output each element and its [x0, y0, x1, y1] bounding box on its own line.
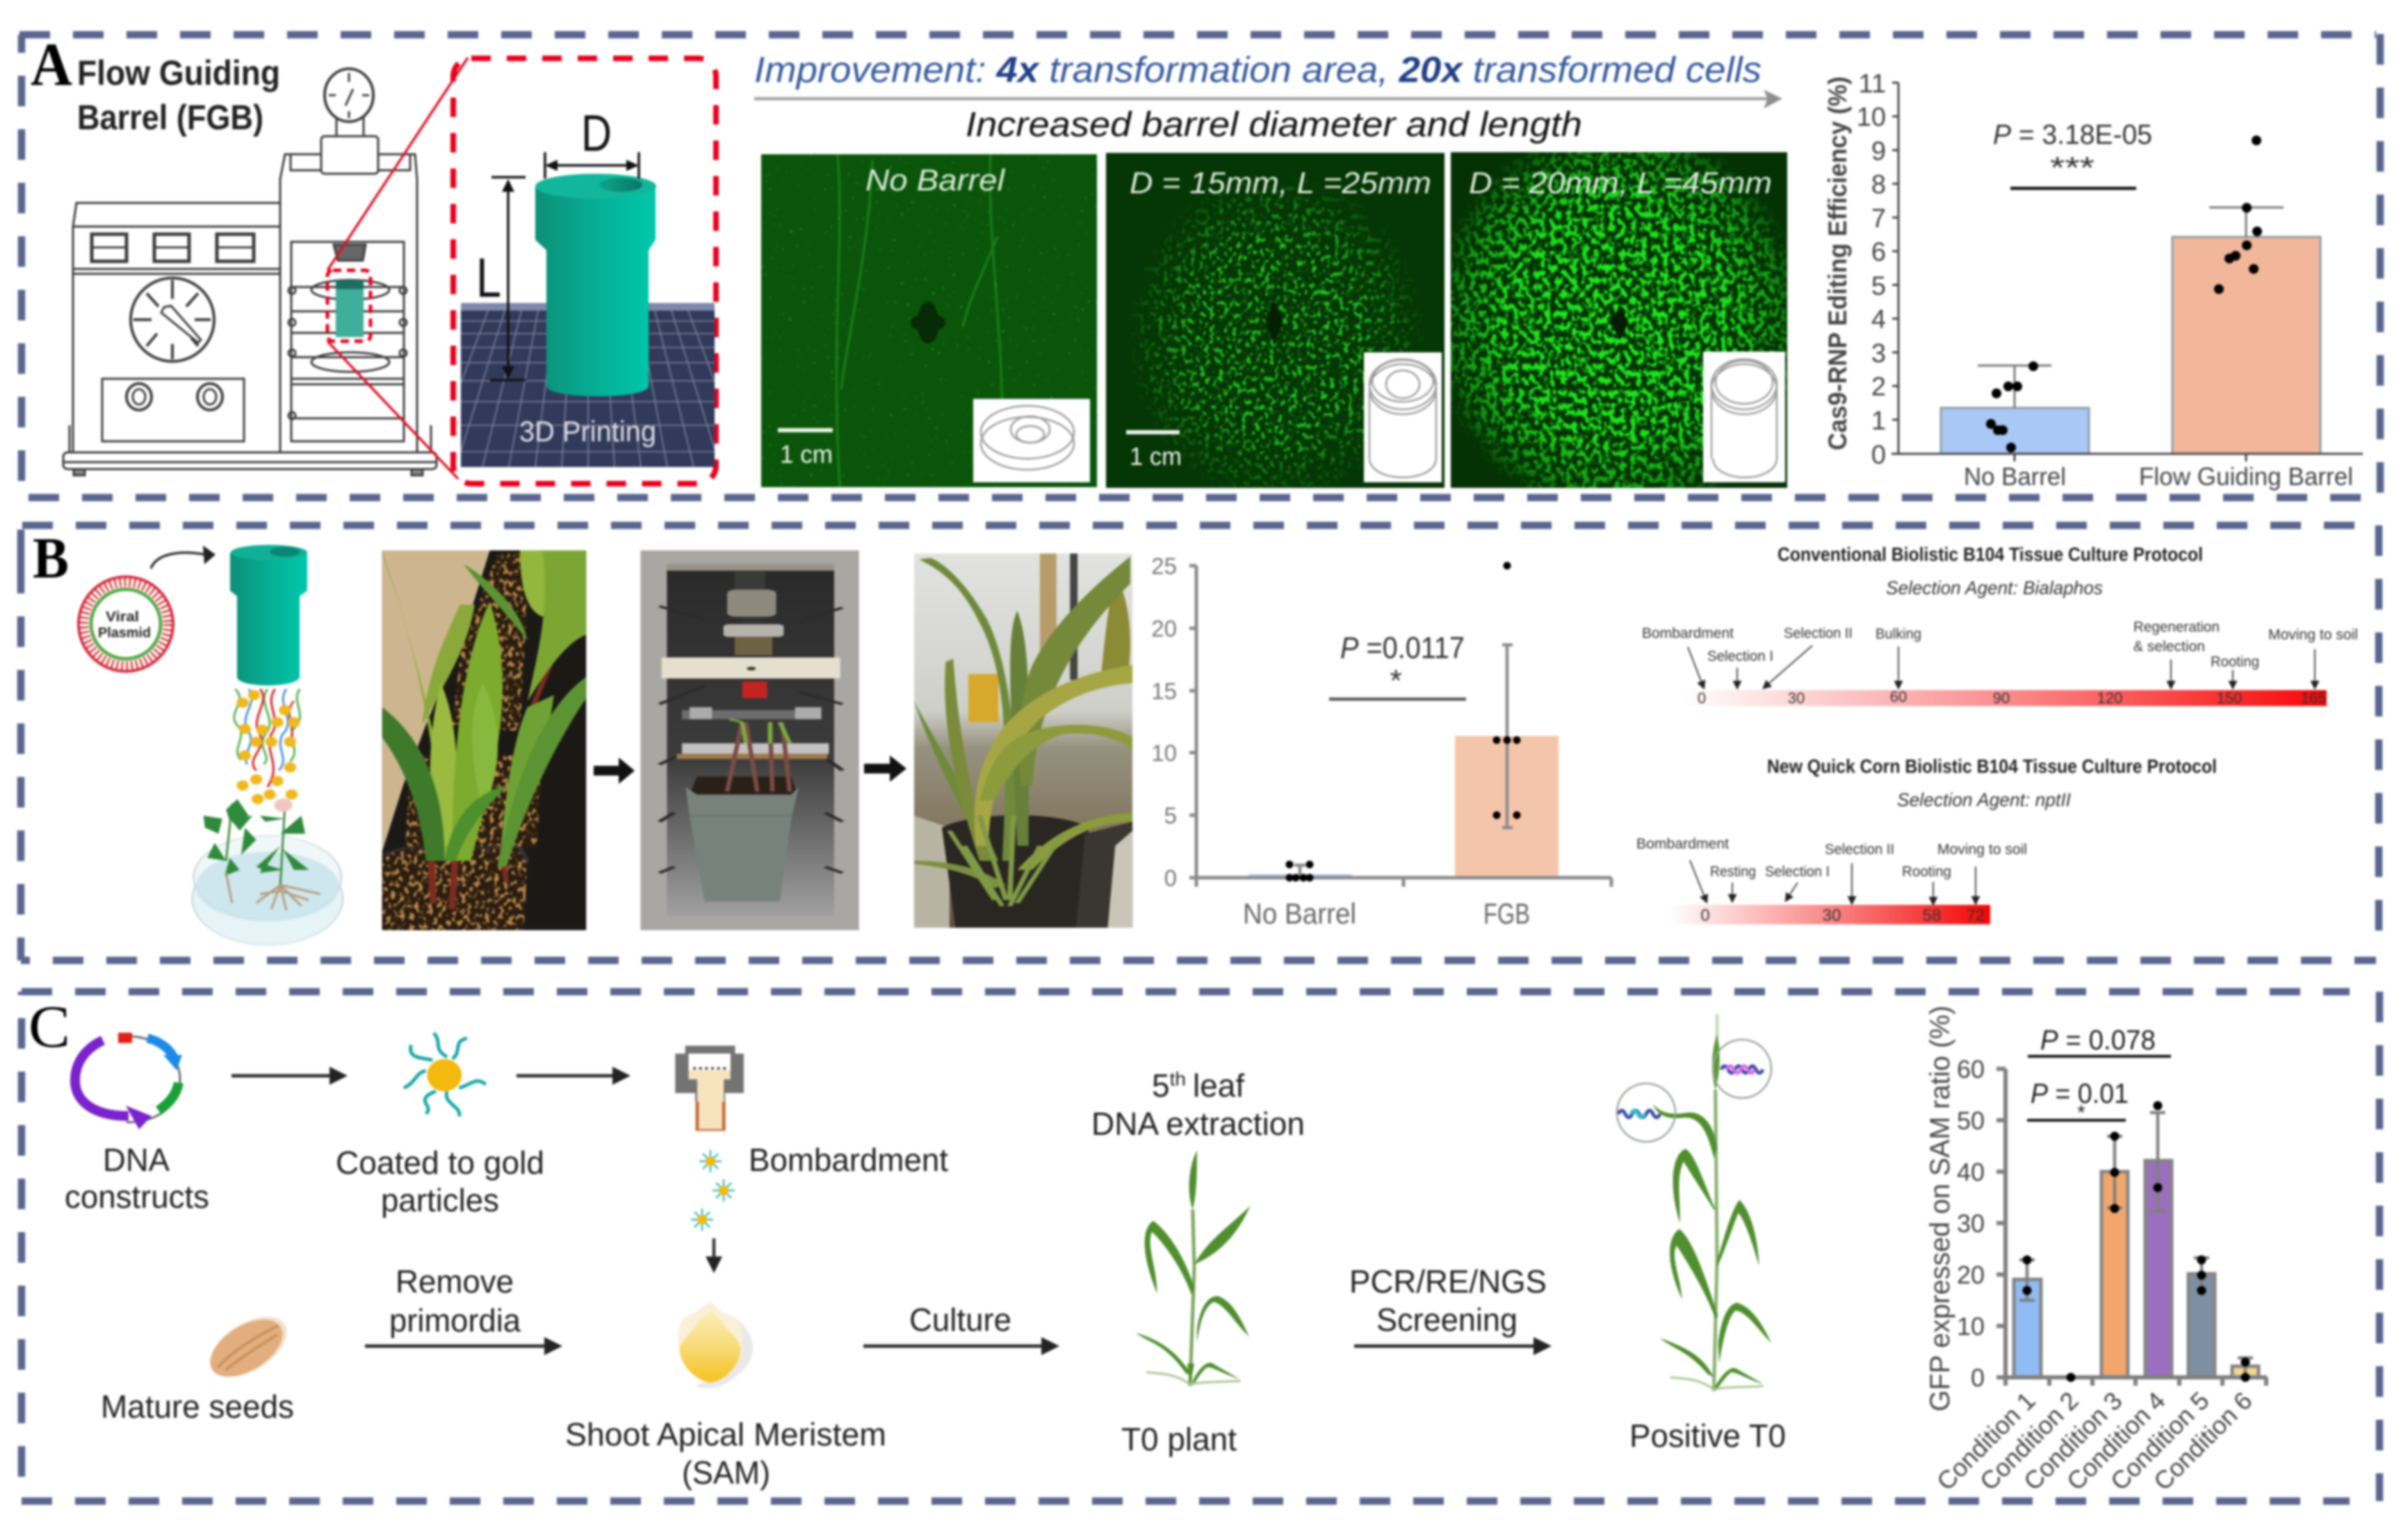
- tick labels: 3: [1871, 339, 1886, 368]
- label: coated to gold particles: Coated to gold: [336, 1145, 544, 1181]
- x axis labels: [1964, 462, 2353, 491]
- x axis labels: No Barrel: [1964, 462, 2066, 491]
- stage arrows: [1688, 646, 2315, 688]
- significance P 0.078: P = 0.078: [2040, 1025, 2156, 1056]
- label: remove primordia: Remove: [396, 1263, 514, 1300]
- icon: DNA construct plasmid: [75, 1033, 182, 1129]
- stage labels: Rooting: [1902, 864, 1951, 880]
- icon: viral plasmid: [79, 577, 173, 671]
- label: mature seeds: Mature seeds: [101, 1388, 294, 1425]
- tick labels: 40: [1957, 1158, 1985, 1186]
- error bars: [1978, 207, 2284, 408]
- panel letter B: B: [33, 526, 69, 591]
- photo: corn seedlings in pots: [382, 550, 586, 931]
- label: 5th leaf DNA extraction: 5: [1152, 1067, 1170, 1104]
- axes: [1996, 1069, 2267, 1386]
- label: PCR RE NGS screening: PCR/RE/NGS: [1349, 1263, 1547, 1300]
- day numbers: 30: [1788, 689, 1805, 707]
- zoom lines to the barrel detail: [327, 58, 468, 479]
- label: DNA constructs: DNA: [103, 1142, 170, 1178]
- icon: mature seed: [200, 1304, 297, 1390]
- tick labels: 11: [1859, 69, 1886, 99]
- arrow: chamber to grown plant: [864, 755, 906, 782]
- bars: [1248, 736, 1559, 878]
- label: 5th leaf DNA extraction: DNA extraction: [1091, 1106, 1305, 1142]
- photo: grown maize plant: [914, 553, 1132, 928]
- icon: gold particle with DNA: [404, 1033, 486, 1116]
- significance P 0.01: [2027, 1079, 2129, 1124]
- tick labels: 10: [1957, 1312, 1985, 1341]
- tick labels: 6: [1871, 238, 1886, 267]
- x axis labels: FGB: [1483, 897, 1530, 930]
- label: shoot apical meristem: [565, 1416, 886, 1491]
- icon: viral plasmid: Plasmid: [98, 625, 151, 641]
- tick labels: 15: [1151, 678, 1177, 704]
- arrow: plasmid to barrel: [151, 546, 215, 568]
- label: 5th leaf DNA extraction: leaf: [1193, 1067, 1244, 1104]
- scale bar: [778, 428, 833, 468]
- data points: [1986, 136, 2262, 452]
- fluorescence photo: D 15 mm: [1106, 153, 1445, 488]
- panel C: wheat workflow: [22, 992, 2379, 1501]
- data points: [2023, 1101, 2250, 1382]
- tick labels: 5: [1871, 272, 1886, 301]
- arrow: gold to gun: [516, 1067, 631, 1085]
- label: 5th leaf DNA extraction: th: [1170, 1068, 1186, 1090]
- stage labels: Moving to soil: [1937, 842, 2027, 858]
- x axis labels: Condition 1: [1931, 1386, 2041, 1496]
- timeline: new quick corn protocol: [1636, 755, 2217, 925]
- label: coated to gold particles: [336, 1145, 544, 1218]
- tick labels: 60: [1957, 1055, 1985, 1083]
- stage labels: Bombardment: [1636, 836, 1729, 852]
- icon: viral plasmid: Viral: [106, 609, 139, 625]
- day numbers: 90: [1993, 689, 2010, 707]
- x axis labels: Condition 6: [2148, 1386, 2258, 1496]
- error bars: [1294, 645, 1513, 878]
- panel A: flow guiding barrel: [19, 31, 2380, 498]
- tick labels: [1857, 69, 1886, 470]
- inset: ring: [973, 399, 1090, 482]
- arrow: particles to meristem: [706, 1238, 722, 1273]
- arrow: plant to positive plant: [1354, 1337, 1552, 1355]
- stage labels: Moving to soil: [2268, 627, 2358, 643]
- y axis title: GFP expressed on SAM ratio (%): [1925, 1006, 1955, 1411]
- heading: flow guiding barrel: Barrel (FGB): [77, 98, 263, 137]
- bar chart: GFP expressed on SAM ratio: [1925, 1006, 2267, 1496]
- tick labels: 0: [1971, 1363, 1985, 1392]
- error bars: [2019, 1113, 2253, 1377]
- tick labels: 8: [1871, 170, 1886, 199]
- detail panel: 3D printed barrel: [448, 54, 721, 489]
- tick labels: 7: [1871, 204, 1886, 233]
- tick labels: 2: [1871, 372, 1886, 402]
- label: 5th leaf DNA extraction: [1091, 1067, 1305, 1142]
- x axis labels: Condition 3: [2018, 1386, 2128, 1496]
- title: New Quick Corn Biolistic B104 Tissue Culture Protocol: [1767, 755, 2217, 777]
- grey arrow: gradient of improvement: [754, 90, 1782, 108]
- tick labels: 4: [1871, 305, 1886, 334]
- label: shoot apical meristem: (SAM): [682, 1455, 770, 1491]
- data points: [1286, 562, 1521, 881]
- arrow: seed to meristem: [365, 1337, 562, 1355]
- icon: shoot apical meristem: [678, 1302, 753, 1388]
- print bed: [459, 302, 716, 469]
- significance: P = 3.18E-05: [1993, 120, 2152, 150]
- scale bar: 1 cm: [1130, 442, 1182, 470]
- tick labels: 0: [1164, 865, 1177, 891]
- y axis title: Cas9-RNP Editing Efficiency (%): [1823, 76, 1852, 450]
- significance: *: [1390, 664, 1402, 698]
- callout: edited DNA on the leaf: [1617, 1083, 1675, 1142]
- day numbers: 30: [1823, 906, 1841, 925]
- day numbers: 0: [1700, 906, 1710, 925]
- significance: ***: [2050, 151, 2094, 185]
- stage labels: Rooting: [2211, 654, 2259, 670]
- tick labels: 20: [1151, 616, 1177, 641]
- label: coated to gold particles: particles: [381, 1182, 499, 1218]
- tick labels: 20: [1957, 1261, 1985, 1289]
- axes: [1189, 566, 1611, 887]
- improvement heading: Improvement: 4x transformation area, 20x transformed cells: [754, 50, 1762, 90]
- selection agent: Selection Agent: nptII: [1897, 789, 2071, 810]
- day numbers: 60: [1890, 688, 1907, 705]
- day numbers: [1698, 688, 2326, 707]
- gradient bar: [1669, 905, 1990, 924]
- tick labels: 1: [1871, 407, 1886, 436]
- arrow: meristem to plant: [863, 1337, 1059, 1355]
- x axis labels: [1931, 1386, 2258, 1496]
- gradient bar: [1682, 690, 2327, 706]
- title: Conventional Biolistic B104 Tissue Culture Protocol: [1777, 543, 2203, 565]
- x axis labels: Flow Guiding Barrel: [2139, 462, 2353, 491]
- mini teal barrel in the machine: [327, 270, 371, 341]
- label: culture: Culture: [909, 1302, 1011, 1338]
- x axis labels: Condition 2: [1974, 1386, 2084, 1496]
- tick labels: 10: [1857, 103, 1886, 132]
- x axis labels: No Barrel: [1243, 897, 1356, 930]
- scale bar: 1 cm: [780, 440, 833, 468]
- tick labels: 10: [1151, 740, 1177, 766]
- label: PCR RE NGS screening: [1349, 1263, 1547, 1338]
- label: shoot apical meristem: Shoot Apical Meristem: [565, 1416, 886, 1452]
- tick labels: [1151, 553, 1177, 891]
- label D 15 mm: D = 15mm, L =25mm: [1130, 166, 1431, 200]
- icon: plants in petri dish: [192, 798, 343, 945]
- panel B: maize transformation: [21, 525, 2379, 960]
- tick labels: 30: [1957, 1209, 1985, 1238]
- stage arrows: [1690, 860, 1976, 904]
- stage labels: Selection I: [1765, 864, 1830, 880]
- dimension L: [476, 177, 526, 380]
- label: remove primordia: [389, 1263, 521, 1338]
- label no barrel: No Barrel: [865, 163, 1005, 197]
- tick labels: 5: [1164, 803, 1177, 828]
- dimension L: L: [476, 247, 501, 309]
- panel letter A: A: [31, 31, 72, 99]
- icon: DNA particles stream: [234, 689, 300, 804]
- significance: [1329, 631, 1466, 699]
- stage labels: & selection: [2133, 639, 2205, 655]
- arrow: seedlings to chamber: [594, 757, 635, 784]
- heading: flow guiding barrel: Flow Guiding: [77, 54, 280, 92]
- icon: T0 wheat plant: [1136, 1151, 1250, 1386]
- day numbers: 150: [2217, 689, 2242, 707]
- callout: edited DNA on the spike: [1713, 1040, 1771, 1098]
- label: positive T0: Positive T0: [1629, 1418, 1786, 1454]
- subheading: increased barrel diameter: Increased barrel diameter and length: [966, 105, 1582, 144]
- stage labels: [1642, 619, 2358, 670]
- icon: teal barrel: [230, 545, 307, 685]
- x axis labels: [1243, 897, 1530, 930]
- stage labels: Regeneration: [2133, 619, 2220, 635]
- photo: plant in gene gun chamber: [640, 550, 859, 931]
- bar chart: No Barrel versus FGB: [1151, 553, 1611, 930]
- day numbers: 120: [2097, 689, 2122, 707]
- label D 20 mm: D = 20mm, L =45mm: [1469, 166, 1772, 200]
- inset: short barrel: [1364, 352, 1442, 482]
- label: DNA constructs: constructs: [65, 1179, 209, 1215]
- dimension D: [545, 104, 639, 179]
- inset: long barrel: [1703, 352, 1785, 482]
- day numbers: 165: [2301, 689, 2326, 707]
- illustration: biolistic gene gun machine: [63, 69, 437, 475]
- dimension D: D: [581, 104, 612, 162]
- tick labels: 25: [1151, 553, 1177, 579]
- 3D printing label: 3D Printing: [519, 415, 656, 448]
- tick labels: [1957, 1055, 1985, 1392]
- x axis labels: Condition 4: [2061, 1386, 2171, 1496]
- timeline: conventional protocol: [1642, 543, 2358, 707]
- label: DNA constructs: [65, 1142, 209, 1215]
- bar chart: Cas9-RNP editing efficiency: [1823, 69, 2363, 491]
- label: T0 plant: T0 plant: [1121, 1421, 1237, 1457]
- stage labels: Bombardment: [1642, 625, 1734, 641]
- x axis labels: Condition 5: [2105, 1386, 2215, 1496]
- tick labels: 9: [1871, 137, 1886, 166]
- stage labels: Resting: [1710, 864, 1756, 880]
- significance: P =0.0117: [1340, 631, 1465, 665]
- day numbers: 72: [1967, 906, 1985, 925]
- day numbers: 0: [1698, 689, 1706, 707]
- bars: [2014, 1161, 2259, 1377]
- heading: flow guiding barrel: [77, 54, 280, 137]
- day numbers: [1700, 906, 1985, 925]
- stage labels: Selection I: [1707, 648, 1773, 664]
- fluorescence photo: no barrel: [761, 154, 1097, 487]
- label: bombardment: Bombardment: [749, 1142, 948, 1178]
- stage labels: [1636, 836, 2027, 880]
- icon: positive T0 wheat plant: [1653, 1014, 1771, 1391]
- significance: [1993, 120, 2152, 188]
- axes: [1892, 83, 2363, 461]
- scale bar: [1126, 430, 1182, 470]
- label: PCR RE NGS screening: Screening: [1376, 1302, 1518, 1338]
- icon: gene gun: [675, 1046, 744, 1130]
- tick labels: 50: [1957, 1106, 1985, 1135]
- tick labels: 0: [1871, 441, 1886, 470]
- arrow: construct to gold: [231, 1067, 348, 1085]
- selection agent: Selection Agent: Bialaphos: [1886, 577, 2103, 598]
- fluorescence photo: D 20 mm: [1451, 152, 1787, 488]
- icon: flying particles: [691, 1150, 735, 1231]
- stage labels: Selection II: [1784, 625, 1853, 641]
- significance P 0.01: *: [2077, 1101, 2085, 1124]
- stage labels: Bulking: [1876, 626, 1921, 642]
- label: remove primordia: primordia: [389, 1302, 521, 1338]
- panel letter C: C: [29, 993, 70, 1060]
- teal barrel: [535, 174, 656, 396]
- significance P 0.01: P = 0.01: [2031, 1079, 2129, 1109]
- bars: [1941, 237, 2320, 454]
- day numbers: 58: [1923, 906, 1941, 925]
- stage labels: Selection II: [1825, 842, 1894, 858]
